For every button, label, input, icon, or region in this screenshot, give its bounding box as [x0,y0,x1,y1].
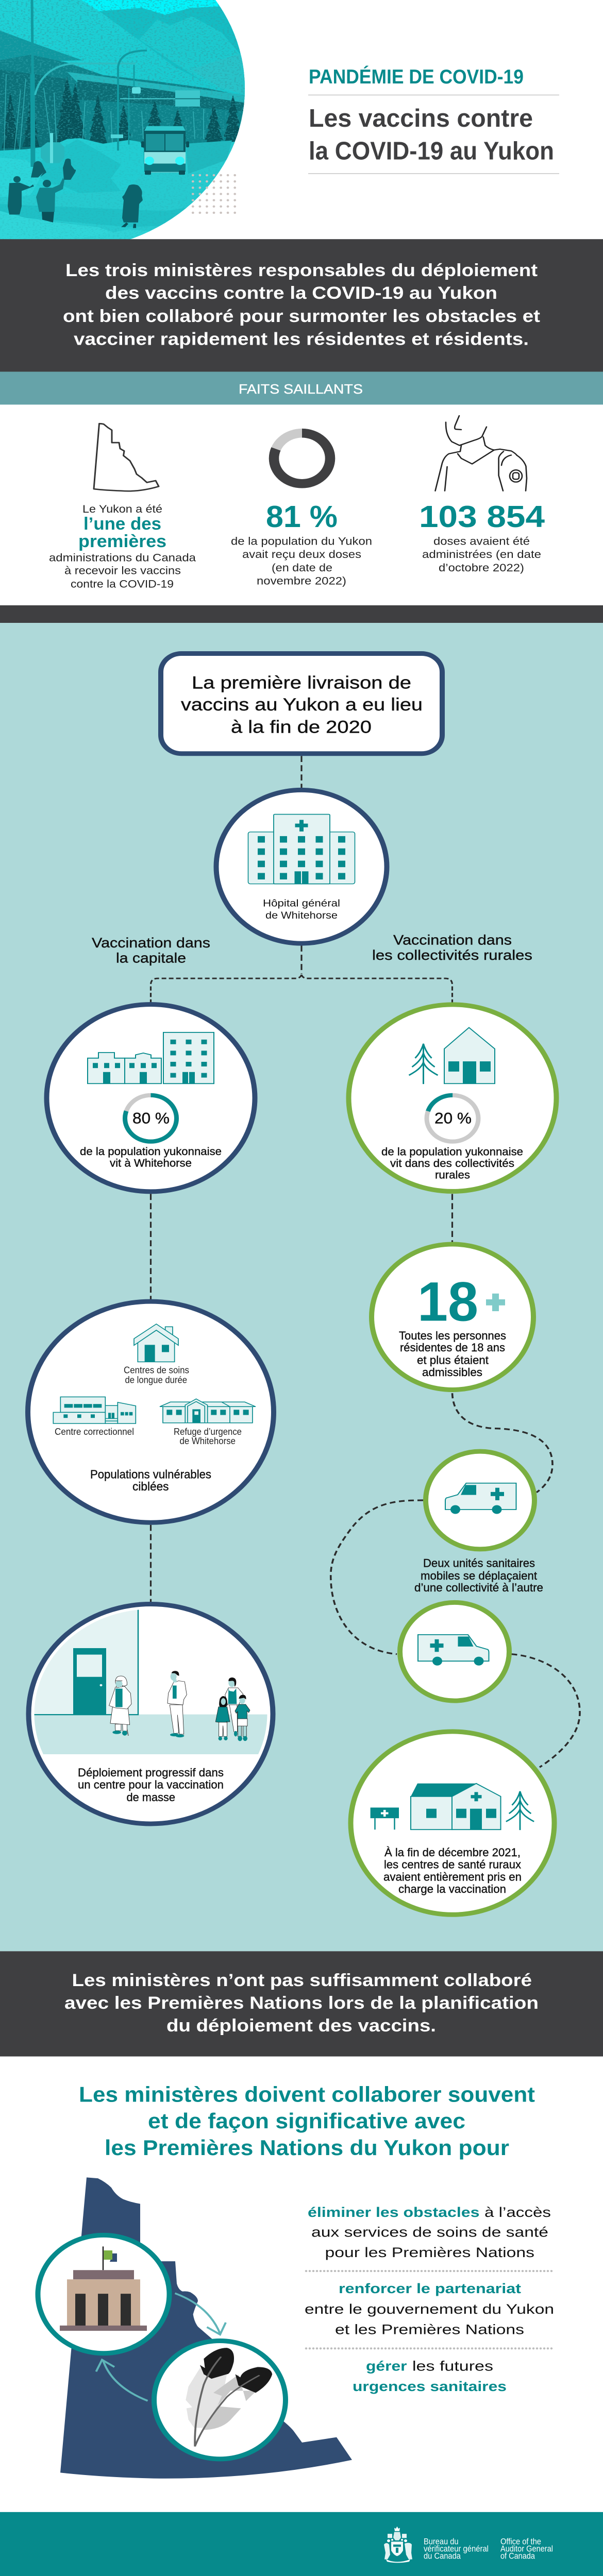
value and caption: vit dans des collectivités [390,1157,514,1170]
recommendation 2: renforcer le partenariat [339,2281,522,2297]
text: administrations du Canada [49,551,196,564]
icon: long-term care home [134,1324,178,1362]
caption: mobile health units [414,1557,543,1595]
recommendation 1: pour les Premières Nations [325,2245,534,2261]
text: 103 854 [419,500,545,534]
caption: de masse [127,1791,175,1804]
icon: correctional centre [53,1397,136,1423]
text: premières [78,531,166,551]
label: Hôpital général [263,898,340,909]
fact: 81 % two doses [231,433,372,587]
circle: rural health centres [350,1732,555,1914]
value and caption [80,1110,222,1169]
caption [399,1329,506,1379]
panel: key message [0,239,603,371]
callout: first delivery [161,653,442,754]
caption: Populations vulnérables [90,1468,211,1481]
people in line [109,1671,250,1741]
label [124,1365,189,1385]
label: de longue durée [125,1375,187,1385]
label: Centres de soins [124,1365,189,1376]
footer [0,2512,603,2576]
label [174,1427,242,1447]
text: de la population du Yukon [231,535,372,547]
arrow: government to First Nations [175,2293,226,2334]
caption [78,1766,224,1804]
value and caption: 20 % [434,1110,472,1127]
kicker: PANDÉMIE DE COVID-19 [309,65,524,88]
caption: résidentes de 18 ans [400,1341,505,1354]
recommendation 2: et les Premières Nations [335,2322,524,2337]
woman with children [215,1677,250,1741]
icon: Yukon outline [94,423,159,491]
hero photo: bus on a snowy Yukon road [0,0,247,239]
bureau name, French: du Canada [424,2552,461,2561]
circle: feathers [154,2341,286,2459]
main title: la COVID-19 au Yukon [309,137,554,165]
label: Centre correctionnel [55,1427,134,1437]
heading: vaccination in the capital [92,935,210,966]
text: novembre 2022) [257,574,346,587]
circle: targeted vulnerable populations [28,1301,274,1522]
label [263,898,340,921]
text: avait reçu deux doses [242,548,361,561]
recommendation 2 [305,2281,554,2337]
recommendation 3: urgences sanitaires [353,2379,507,2395]
dark divider band [0,605,603,623]
icon: emergency shelter [160,1399,256,1423]
heading: vaccination in rural communities [372,933,532,963]
value and caption: vit à Whitehorse [110,1156,192,1169]
caption: À la fin de décembre 2021, [384,1846,521,1859]
bureau name, English: of Canada [500,2552,535,2561]
text: à recevoir les vaccins [64,564,181,577]
text: d’octobre 2022) [439,561,524,574]
donut chart 80 % [125,1095,176,1142]
heading: vaccination in rural communities: les collectivités rurales [372,947,532,963]
Yukon silhouette [60,2177,352,2479]
caption: avaient entièrement pris en [383,1871,522,1884]
panel: finding about First Nations: avec les Premières Nations lors de la planification [64,1993,539,2012]
label: de Whitehorse [265,910,338,921]
plus sign [486,1294,505,1311]
recommendation 3 [353,2359,507,2395]
text: (en date de [272,561,332,574]
circle: mass vaccination centre [29,1604,273,1824]
value and caption: de la population yukonnaise [80,1145,222,1158]
heading band: faits saillants: FAITS SAILLANTS [239,381,363,396]
recommendation 1: aux services de soins de santé [311,2225,548,2240]
text [231,500,372,587]
value and caption: 80 % [132,1110,170,1127]
caption [383,1846,522,1896]
recommendation 1: éliminer les obstacles [308,2205,480,2220]
main title: Les vaccins contre [309,105,533,132]
caption: charge la vaccination [398,1883,506,1896]
callout: first delivery: vaccins au Yukon a eu lieu [181,694,423,715]
caption: et plus étaient [417,1354,489,1367]
circle: mobile unit 2 [400,1602,509,1701]
bureau name, English [500,2537,553,2561]
fact: first administrations [49,423,196,590]
callout: first delivery: La première livraison de [192,672,411,692]
bureau name, English: Office of the [500,2537,541,2546]
text: 81 % [266,500,338,534]
caption: mobile health units: Deux unités sanitaires [423,1557,535,1570]
bureau name, English: Auditor General [500,2544,553,2553]
circle: mobile unit 1 [426,1451,534,1549]
caption: mobile health units: mobiles se déplaçaient [421,1569,537,1583]
number 18: 18 [417,1271,478,1333]
heading: recommendation [79,2083,535,2160]
heading: vaccination in the capital: la capitale [116,951,186,966]
bureau name, French: vérificateur général [424,2544,489,2553]
illustration: room [31,1604,273,1754]
text: l’une des [83,514,161,534]
caption: Déploiement progressif dans [78,1766,224,1780]
text: doses avaient été [433,535,530,547]
recommendation 3: les futures [412,2359,493,2374]
caption: Toutes les personnes [399,1329,506,1343]
callout: first delivery: à la fin de 2020 [231,717,372,737]
caption: ciblées [132,1480,169,1494]
caption: mobile health units: d’une collectivité à l’autre [414,1581,543,1595]
caption [90,1468,211,1494]
panel: finding about First Nations: Les ministères n’ont pas suffisamment collaboré [72,1970,532,1990]
heading band: faits saillants [0,371,603,404]
text: administrées (en date [422,548,541,561]
donut chart 20 % [420,1089,485,1147]
panel: key message: Les trois ministères responsables du déploiement [65,260,538,280]
text [419,500,545,574]
donut chart 81 % [274,433,330,484]
text: Le Yukon a été [82,502,162,515]
man in jacket [167,1671,187,1737]
recommendation 1 [308,2205,551,2261]
text: contre la COVID-19 [71,578,174,590]
panel: key message: des vaccins contre la COVID-19 au Yukon [105,283,497,303]
heading: recommendation: les Premières Nations du Yukon pour [105,2136,509,2160]
icon: ambulance [445,1483,516,1514]
bureau name, French: Bureau du [424,2537,458,2546]
heading: recommendation: Les ministères doivent collaborer souvent [79,2083,535,2107]
caption: admissibles [422,1366,482,1379]
title block [308,65,559,174]
value and caption [381,1110,523,1181]
dashed connectors [150,756,580,1767]
circle: Whitehorse General Hospital [216,790,387,943]
icon: tree and house [409,1027,495,1084]
icon: health centre, sign and tree [371,1784,534,1830]
heading: vaccination in rural communities: Vaccination dans [393,933,512,948]
circle: 20 % in rural communities [348,1005,557,1191]
circle: 18+ eligibility [372,1244,533,1389]
senior with cane [109,1676,131,1736]
panel: vaccine rollout flowchart background [0,623,603,1951]
bureau name, French [424,2537,489,2561]
circle: 80 % in Whitehorse [46,1004,255,1192]
recommendation 1: à l’accès [484,2205,551,2220]
icon: coat of arms of Canada [384,2527,412,2563]
panel: finding about First Nations: du déploiement des vaccins. [166,2015,436,2036]
recommendation 3: gérer [366,2359,407,2374]
panel: finding about First Nations [0,1951,603,2057]
icon: city buildings [88,1032,214,1083]
main title [309,105,554,165]
heading: vaccination in the capital: Vaccination dans [92,935,210,951]
fact: doses administered [419,416,545,574]
map: Yukon territory with government and First Nations [38,2177,352,2479]
text [49,502,196,590]
caption: les centres de santé ruraux [384,1858,521,1871]
icon: ambulance [418,1635,489,1666]
label: Refuge d’urgence [174,1427,242,1437]
value and caption: rurales [435,1168,470,1181]
arrow: First Nations to government [96,2360,147,2401]
circle: government building [38,2235,169,2353]
heading: recommendation: et de façon significative avec [148,2109,465,2133]
panel: key message: ont bien collaboré pour surmonter les obstacles et [63,306,540,326]
panel: key message: vacciner rapidement les résidentes et résidents. [74,329,529,349]
icon: vaccinated shoulder [435,416,527,491]
recommendation 2: entre le gouvernement du Yukon [305,2301,554,2317]
label: de Whitehorse [179,1436,236,1447]
icon: hospital [248,815,355,884]
value and caption: de la population yukonnaise [381,1145,523,1158]
decorative dot grid [192,174,236,214]
caption: un centre pour la vaccination [78,1778,224,1791]
